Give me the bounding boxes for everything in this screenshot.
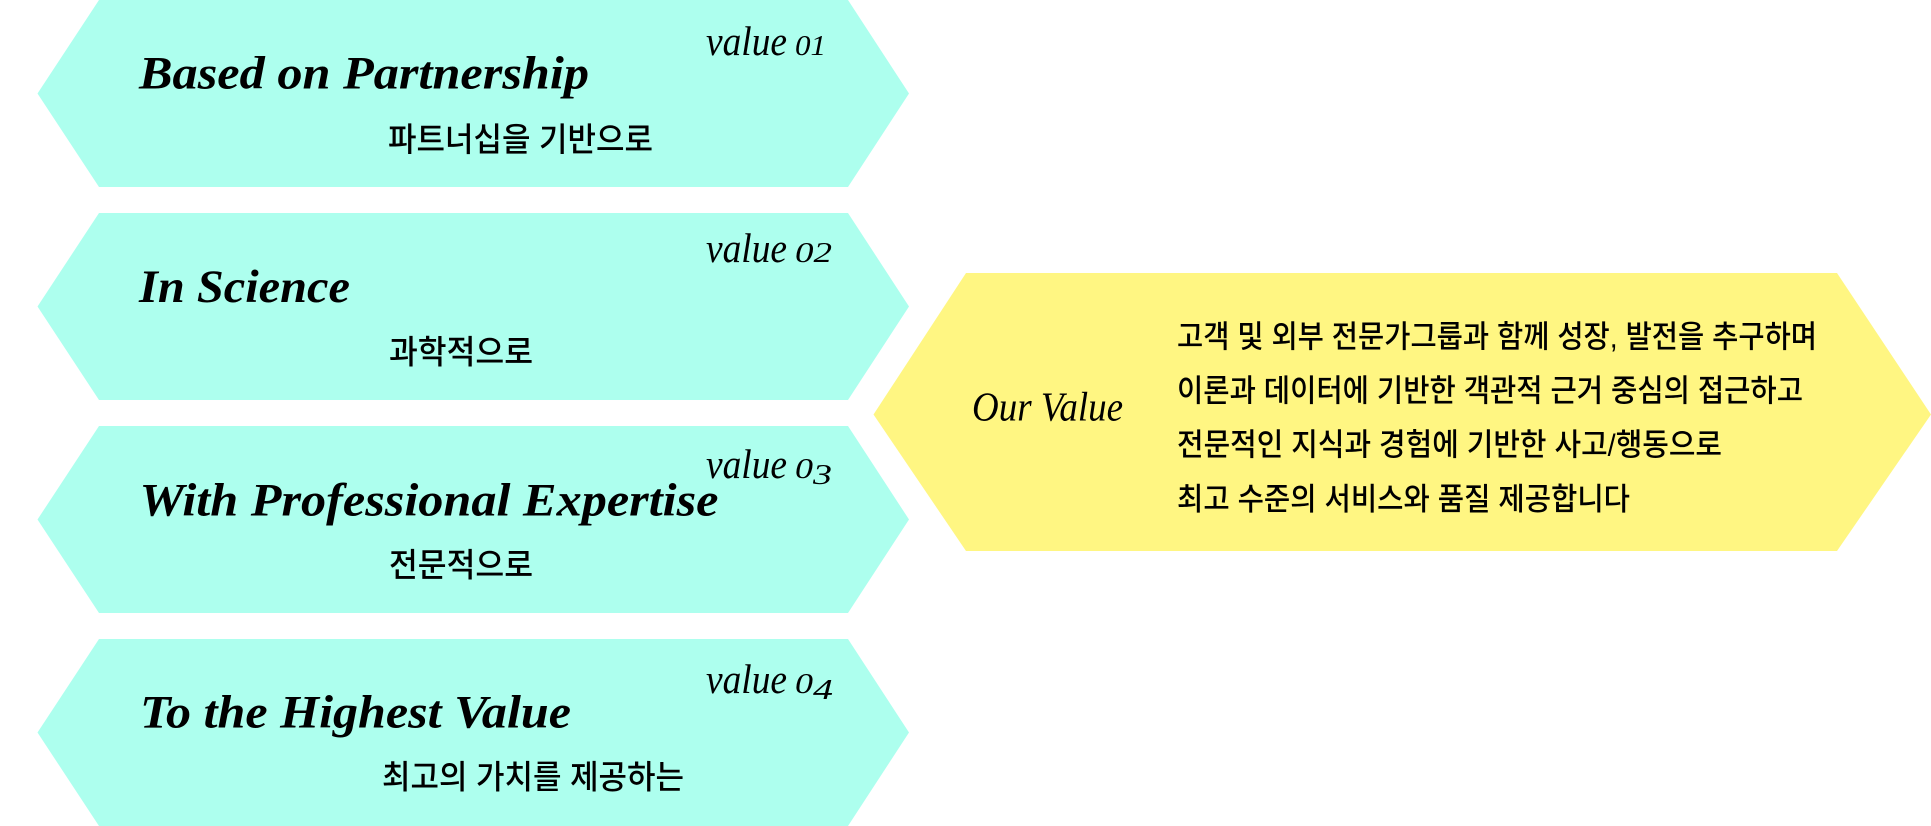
- heading: Our Value: Our Value: [972, 384, 1123, 430]
- label: value 01: value: [706, 18, 787, 64]
- heading: Based on Partnership: Based on Partnership: [138, 48, 589, 100]
- hexagon background: [38, 639, 909, 826]
- label: value 02: value: [706, 225, 787, 271]
- subtitle: 최고의 가치를 제공하는: [382, 758, 684, 796]
- subtitle: 과학적으로: [389, 334, 533, 370]
- panel: value 02: [38, 213, 909, 400]
- label: value 03: 0: [795, 454, 813, 485]
- label: value 01: 01: [795, 31, 826, 62]
- label: value 02: 02: [795, 238, 832, 269]
- hexagon background: [38, 0, 909, 187]
- label: value 03: [706, 441, 832, 491]
- panel: value 03: [38, 426, 909, 613]
- heading: To the Highest Value: To the Highest Value: [140, 686, 571, 738]
- heading: In Science: In Science: [138, 261, 350, 313]
- description text block: [1177, 320, 1817, 517]
- label: value 04: 4: [813, 675, 833, 706]
- heading: With Professional Expertise: With Professional Expertise: [140, 474, 718, 526]
- description text block: 전문적인 지식과 경험에 기반한 사고/행동으로: [1177, 428, 1722, 462]
- subtitle: 전문적으로: [389, 546, 533, 584]
- description text block: 최고 수준의 서비스와 품질 제공합니다: [1177, 482, 1630, 517]
- panel: value 04: [38, 639, 909, 826]
- label: value 03: value: [706, 441, 787, 487]
- panel: value 01: [38, 0, 909, 187]
- description text block: 이론과 데이터에 기반한 객관적 근거 중심의 접근하고: [1177, 374, 1803, 408]
- subtitle: 파트너십을 기반으로: [388, 121, 653, 158]
- panel: Our Value: [874, 273, 1931, 551]
- label: value 04: 0: [795, 669, 813, 700]
- hexagon background: [874, 273, 1931, 551]
- hexagon background: [38, 426, 909, 613]
- label: value 04: value: [706, 656, 787, 702]
- label: value 04: [706, 656, 833, 706]
- label: value 03: 3: [812, 460, 832, 491]
- hexagon background: [38, 213, 909, 400]
- description text block: 고객 및 외부 전문가그룹과 함께 성장, 발전을 추구하며: [1177, 320, 1817, 354]
